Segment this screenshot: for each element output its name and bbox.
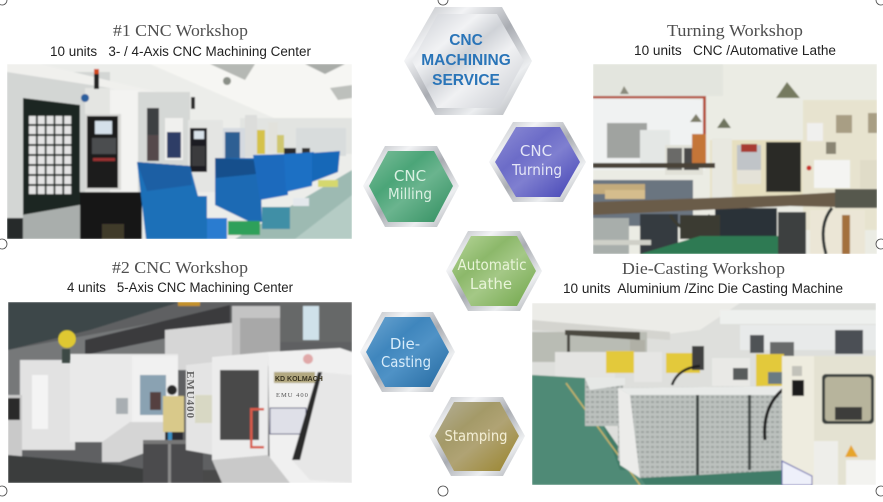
right KOLMACH machine: [186, 362, 214, 455]
bar stock tubes: [593, 163, 715, 168]
photo: Turning workshop with lathe and bar stock: [593, 64, 877, 254]
hexagon: Automatic Lathe: Automatic: [458, 256, 526, 274]
crane hook: [58, 330, 76, 363]
lower dark cabinet: [80, 192, 142, 239]
right wall panels: [803, 100, 877, 230]
gray machine base: [23, 205, 80, 239]
hexagon: CNC Milling: [363, 146, 459, 227]
center white machine: [70, 354, 178, 442]
hexagon: Die-Casting: [360, 312, 455, 392]
heading: #2 CNC Workshop: 4 units 5-Axis CNC Machining Center: [67, 280, 293, 295]
machine label KOLMACH: KD KOLMACH: [275, 376, 323, 383]
machine label EMU400: EMU400: [184, 371, 196, 419]
floor: [235, 170, 352, 239]
heading: #1 CNC Workshop: 10 units 3- / 4-Axis CNC Machining Center: [50, 44, 311, 59]
control panel: [85, 114, 121, 190]
pendant lamps: [776, 82, 800, 98]
hexagon: Stamping: Stamping: [444, 427, 508, 445]
hexagon: Stamping: [429, 397, 525, 476]
heading: #1 CNC Workshop: [50, 21, 311, 59]
hexagon: Automatic Lathe: Lathe: [470, 275, 512, 293]
hexagon: Automatic Lathe: [446, 231, 542, 311]
hexagon: Die-Casting: Die-: [390, 335, 420, 353]
blue bins: [137, 162, 207, 239]
heading: Turning Workshop: 10 units CNC /Automative Lathe: [634, 43, 836, 58]
floor: [532, 375, 645, 485]
machine model label: EMU 400: [276, 392, 309, 399]
hexagon: CNC Turning: [489, 122, 586, 202]
photo: Die-casting workshop with stacked ingots: [532, 303, 876, 485]
heading: Die-Casting Workshop: 10 units Aluminium /Zinc Die Casting Machine: [563, 281, 843, 296]
hexagon: CNC Machining Service: MACHINING: [421, 52, 511, 69]
machines with yellow: [554, 350, 607, 378]
operator: [167, 385, 177, 395]
control cabinet: [815, 357, 876, 484]
heading: #2 CNC Workshop: [67, 258, 293, 295]
hexagon: CNC Machining Service: CNC: [449, 32, 483, 49]
hexagon: CNC Turning: Turning: [511, 161, 562, 179]
heading: Die-Casting Workshop: [563, 259, 843, 296]
heading: Turning Workshop: Turning Workshop: [667, 21, 803, 40]
floor: [8, 454, 144, 483]
hexagon: CNC Milling: CNC: [394, 167, 426, 185]
photo: #2 CNC workshop with 5-axis machines and operator: [8, 302, 352, 483]
heading: #2 CNC Workshop: #2 CNC Workshop: [112, 258, 248, 277]
hexagon: CNC Turning: CNC: [520, 142, 552, 160]
black keypad door: [23, 98, 80, 215]
signal lights: [94, 70, 99, 89]
heading: Turning Workshop: [634, 21, 836, 58]
ingot stacks: [585, 378, 623, 426]
hexagon: CNC Machining Service: SERVICE: [432, 72, 500, 89]
hexagon: Die-Casting: Casting: [381, 353, 431, 371]
heading: Die-Casting Workshop: Die-Casting Workshop: [622, 259, 785, 278]
hexagon: CNC Milling: Milling: [388, 185, 432, 203]
hexagon: CNC Machining Service: [404, 7, 532, 115]
left white machine: [20, 360, 75, 450]
photo: #1 CNC workshop with machining centers and blue bins: [7, 64, 352, 239]
lower machinery: [593, 180, 693, 226]
heading: #1 CNC Workshop: #1 CNC Workshop: [113, 21, 248, 40]
